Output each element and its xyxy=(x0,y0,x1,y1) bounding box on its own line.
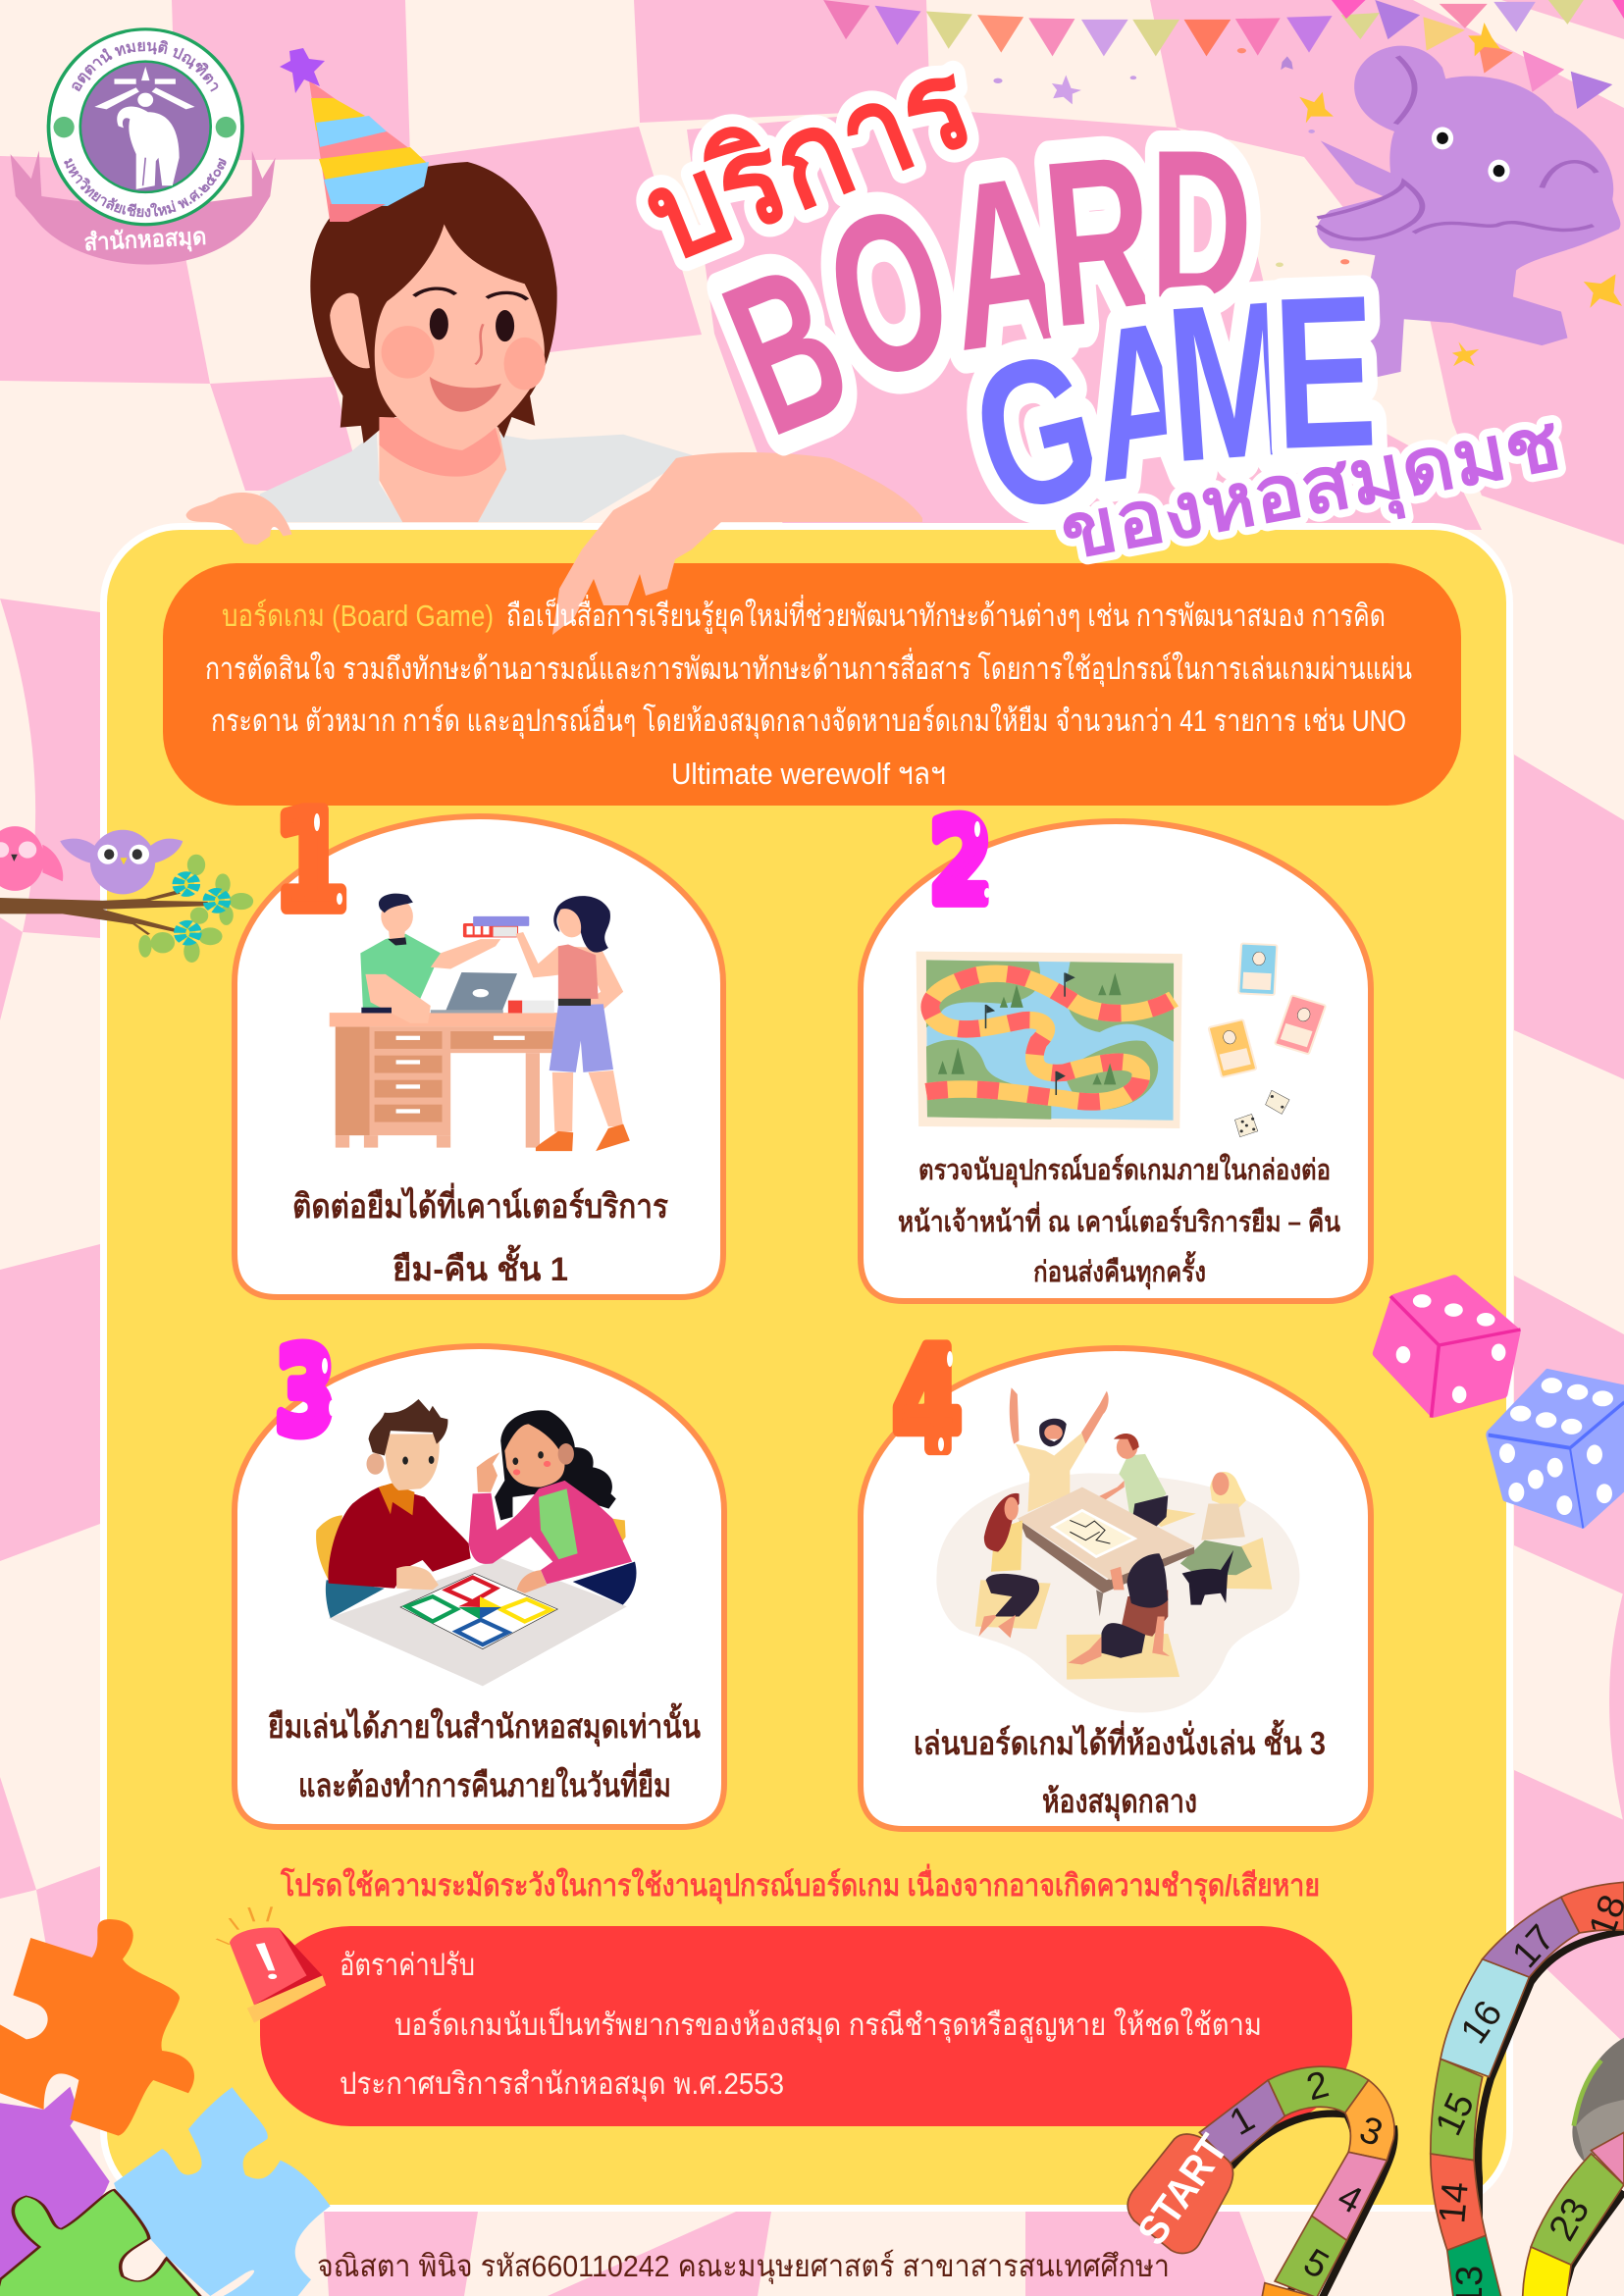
title: GAME: M xyxy=(1160,253,1303,508)
left woman xyxy=(991,1520,1022,1572)
fine text: บอร์ดเกมนับเป็นทรัพยากรของห้องสมุด กรณีชำรุดหรือสูญหาย ให้ชดใช้ตาม xyxy=(394,2007,1262,2044)
step text: ยืม-คืน ชั้น 1 xyxy=(393,1244,568,1288)
elephant arm xyxy=(1321,141,1397,203)
right arm and pointing hand xyxy=(552,452,922,635)
man xyxy=(360,934,441,1010)
orange intro box xyxy=(163,563,1461,806)
books xyxy=(463,923,518,937)
title: BOARD: O xyxy=(805,157,973,429)
library label: สำนักหอสมุด xyxy=(83,224,207,258)
university name ring text: มหาวิทยาลัยเชียงใหม่ พ.ศ.๒๕๐๗ xyxy=(64,158,227,218)
bunting flags xyxy=(823,0,1624,366)
step text xyxy=(292,1182,669,1288)
number 2: 2 xyxy=(929,795,992,929)
hair xyxy=(310,162,557,444)
leaves xyxy=(138,855,253,963)
pink die xyxy=(1378,1279,1521,1418)
fine text: ประกาศบริการสำนักหอสมุด พ.ศ.2553 xyxy=(340,2066,784,2103)
path labels: 16 xyxy=(1453,1994,1510,2051)
card frame xyxy=(235,1346,724,1827)
number 3: 3 xyxy=(275,1323,336,1461)
step text xyxy=(914,1719,1326,1822)
title: service: บริการ xyxy=(626,29,991,288)
red box xyxy=(260,1926,1352,2126)
card 1 xyxy=(235,784,723,1297)
step text: หน้าเจ้าหน้าที่ ณ เคาน์เตอร์บริการยืม – คืน xyxy=(898,1201,1340,1238)
path labels: 15 xyxy=(1428,2087,1483,2142)
path labels: 23 xyxy=(1542,2191,1598,2248)
orange piece xyxy=(0,1919,194,2136)
woman hair xyxy=(495,1410,616,1520)
main yellow panel xyxy=(104,526,1509,2208)
illustration: friends around a table xyxy=(936,1387,1299,1712)
path labels: 5 xyxy=(1296,2241,1336,2287)
path shadow xyxy=(1231,1931,1624,2296)
title: BOARD: B xyxy=(696,218,877,482)
step text: ก่อนส่งคืนทุกครั้ง xyxy=(1033,1250,1206,1289)
woman xyxy=(516,932,623,1017)
party hat xyxy=(280,48,429,222)
illustration: desk and two people xyxy=(330,894,630,1151)
elephant emblem xyxy=(117,106,180,189)
card 3 xyxy=(235,1323,724,1827)
elephant mascot xyxy=(1317,46,1620,378)
back-turned woman xyxy=(1121,1590,1168,1637)
title: BOARD: A xyxy=(930,124,1076,400)
neck xyxy=(379,417,506,522)
face xyxy=(375,225,545,450)
number 1: 1 xyxy=(274,784,348,940)
card frame xyxy=(861,1348,1371,1829)
illustration: game board xyxy=(917,944,1326,1137)
title: GAME: A xyxy=(1074,274,1213,527)
laptop xyxy=(445,972,517,1011)
ludo board xyxy=(400,1574,557,1649)
path labels xyxy=(1223,1890,1624,2296)
desk xyxy=(336,1026,450,1135)
step text: ยืมเล่นได้ภายในสำนักหอสมุดเท่านั้น xyxy=(268,1702,701,1748)
branch xyxy=(0,890,208,935)
path labels: 4 xyxy=(1331,2176,1369,2222)
flowers xyxy=(179,875,225,941)
blonde woman xyxy=(1210,1472,1246,1510)
title: GAME: G xyxy=(953,306,1120,557)
step text: ห้องสมุดกลาง xyxy=(1042,1783,1197,1822)
title: of the CMU library: ของหอสมุดมช xyxy=(1054,398,1567,581)
shirt xyxy=(260,431,694,522)
title: GAME xyxy=(953,251,1380,557)
standing man xyxy=(1016,1433,1085,1512)
step text xyxy=(898,1153,1340,1289)
card 2 xyxy=(861,795,1371,1301)
step text: และต้องทำการคืนภายในวันที่ยืม xyxy=(298,1762,671,1803)
step text xyxy=(268,1702,701,1803)
fine text: อัตราค่าปรับ xyxy=(340,1948,475,1982)
fine text xyxy=(340,1948,1262,2103)
woman cardigan xyxy=(469,1481,632,1584)
motto ring text: อตฺตานํ ทมยนฺติ ปณฺฑิตา xyxy=(73,40,218,92)
number 4: 4 xyxy=(893,1319,962,1482)
blue die xyxy=(1489,1373,1624,1528)
blob xyxy=(936,1473,1299,1712)
path labels: 1 xyxy=(1223,2098,1262,2144)
intro text xyxy=(205,595,1412,791)
leaning man xyxy=(1119,1454,1167,1520)
fine panel xyxy=(260,1926,1352,2126)
path labels: 2 xyxy=(1302,2063,1334,2109)
table xyxy=(1020,1520,1194,1593)
woman face xyxy=(504,1424,565,1487)
person with party hat xyxy=(260,162,694,522)
intro text: Ultimate werewolf ฯลฯ xyxy=(671,757,946,791)
dice xyxy=(1378,1279,1624,1528)
birds on branch xyxy=(0,826,253,963)
ribbon xyxy=(11,151,276,265)
title: GAME: E xyxy=(1270,251,1380,495)
title: BOARD: D xyxy=(1150,106,1252,341)
ear xyxy=(330,293,370,368)
light blue piece xyxy=(114,2087,331,2296)
left hand on panel xyxy=(186,493,292,545)
path labels: 3 xyxy=(1354,2109,1388,2155)
card frame xyxy=(861,821,1371,1301)
step text: ติดต่อยืมได้ที่เคาน์เตอร์บริการ xyxy=(292,1182,669,1226)
title: BOARD: R xyxy=(1035,106,1164,377)
path labels: 14 xyxy=(1432,2180,1477,2225)
warning line: โปรดใช้ความระมัดระวังในการใช้งานอุปกรณ์บอร์ดเกม เนื่องจากอาจเกิดความชำรุด/เสียหาย xyxy=(280,1863,1320,1905)
university logo xyxy=(10,27,275,265)
icon: siren xyxy=(217,1906,326,2023)
man face xyxy=(385,1435,440,1490)
pink bird xyxy=(0,826,63,891)
man sweater xyxy=(328,1486,471,1589)
purple piece xyxy=(0,2087,110,2296)
card frame xyxy=(235,816,723,1297)
card 4 xyxy=(861,1319,1371,1829)
green piece xyxy=(0,2190,201,2296)
puzzle pieces xyxy=(0,1919,331,2296)
title: BOARD xyxy=(696,106,1252,482)
lilac bird xyxy=(60,830,183,894)
cat xyxy=(1182,1550,1233,1605)
intro text: บอร์ดเกม (Board Game) xyxy=(222,599,494,633)
path labels: 17 xyxy=(1504,1917,1563,1976)
small dice xyxy=(1266,1090,1289,1114)
illustration: two people playing ludo xyxy=(316,1399,637,1686)
snake board game path xyxy=(1127,1882,1624,2296)
start label: START xyxy=(1128,2126,1236,2253)
intro text: ถือเป็นสื่อการเรียนรู้ยุคใหม่ที่ช่วยพัฒนาทักษะด้านต่างๆ เช่น การพัฒนาสมอง การคิด xyxy=(506,595,1386,635)
step text: ตรวจนับอุปกรณ์บอร์ดเกมภายในกล่องต่อ xyxy=(918,1153,1331,1187)
step text: เล่นบอร์ดเกมได้ที่ห้องนั่งเล่น ชั้น 3 xyxy=(914,1719,1326,1761)
cards xyxy=(1238,944,1277,995)
footer credit: จณิสตา พินิจ รหัส660110242 คณะมนุษยศาสตร์ สาขาสารสนเทศศึกษา xyxy=(317,2249,1170,2285)
